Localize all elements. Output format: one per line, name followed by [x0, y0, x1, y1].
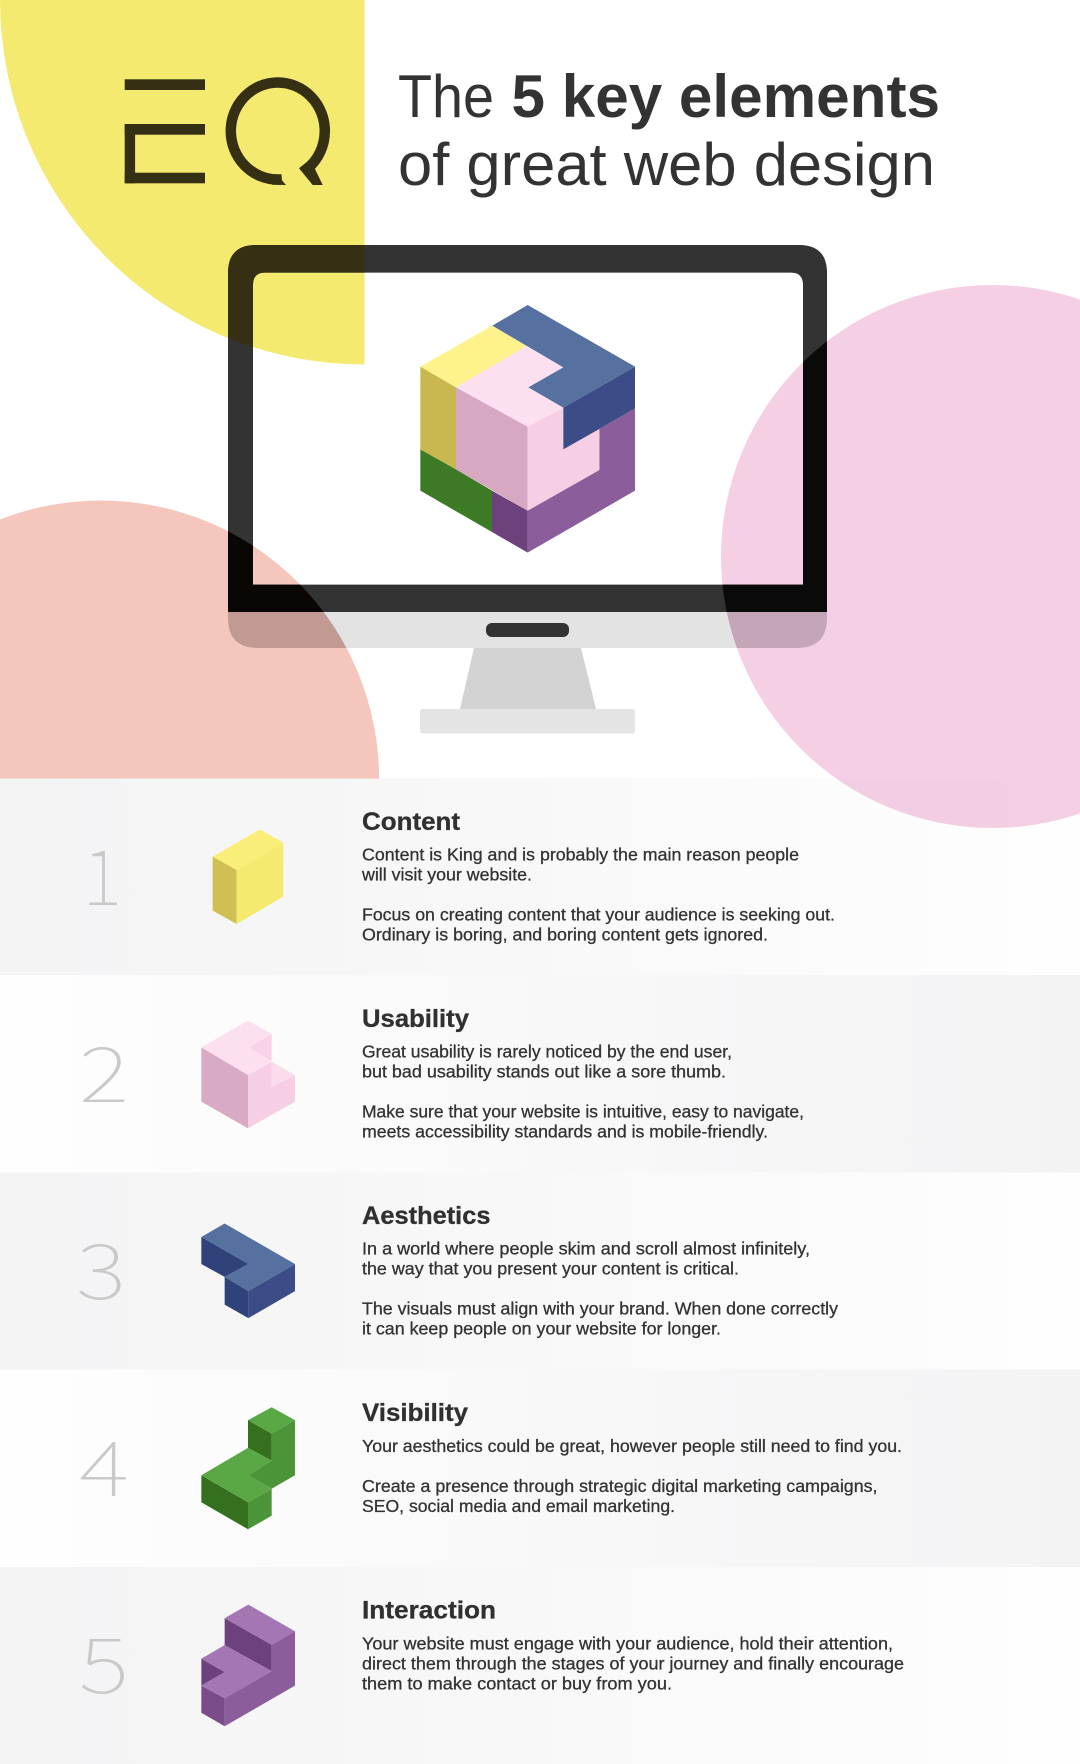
text: usability description: meets accessibility standards and is mobile-friendly. [362, 1121, 768, 1141]
icon: assembled cube [420, 305, 635, 553]
text: interaction description: Your website must engage with your audience, hold their attention, [362, 1634, 893, 1654]
text: content description: Focus on creating content that your audience is seeking out. [362, 904, 835, 924]
text: interaction description: direct them through the stages of your journey and finally encourage [362, 1654, 904, 1674]
monitor bezel [228, 245, 827, 612]
text: usability description [362, 1042, 804, 1141]
text: content description: Ordinary is boring, and boring content gets ignored. [362, 924, 768, 944]
title: of great web design [398, 131, 935, 198]
icon: blue block [201, 1224, 295, 1318]
text: aesthetics description: The visuals must align with your brand. When done correctly [362, 1298, 838, 1318]
panel: row 5 interaction [0, 1567, 1080, 1764]
panel: row 3 aesthetics [0, 1172, 1080, 1370]
text: aesthetics description: In a world where people skim and scroll almost infinitely, [362, 1239, 810, 1259]
panel: row 2 usability [0, 975, 1080, 1172]
icon: pink block [201, 1021, 295, 1128]
text: interaction description: them to make contact or buy from you. [362, 1674, 672, 1694]
logo: EQ [125, 79, 325, 185]
text: visibility description: Create a presence through strategic digital marketing campaigns, [362, 1476, 878, 1496]
monitor base [420, 709, 635, 734]
text: aesthetics description [362, 1239, 838, 1338]
number 3: 3 [76, 1211, 126, 1322]
icon: purple block [201, 1605, 295, 1726]
heading: Visibility: Visibility [362, 1399, 468, 1427]
number 4: 4 [79, 1408, 129, 1519]
text: usability description: but bad usability stands out like a sore thumb. [362, 1062, 726, 1082]
title: 5 key elements [512, 63, 940, 130]
monitor stand [460, 648, 596, 709]
title [398, 63, 940, 198]
heading: Interaction: Interaction [362, 1596, 496, 1624]
text: interaction description [362, 1634, 904, 1694]
background circle: coral [0, 500, 379, 778]
heading: Usability: Usability [362, 1005, 469, 1033]
panel: row 4 visibility [0, 1370, 1080, 1567]
text: aesthetics description: the way that you present your content is critical. [362, 1259, 739, 1279]
monitor button [486, 623, 569, 637]
number 5: 5 [79, 1605, 129, 1716]
title: The [398, 63, 494, 130]
text: visibility description: Your aesthetics could be great, however people still need to find you. [362, 1436, 902, 1456]
background circle: yellow [0, 0, 364, 364]
number 2: 2 [79, 1014, 129, 1125]
text: content description: Content is King and is probably the main reason people [362, 845, 799, 865]
text: content description: will visit your website. [361, 865, 532, 885]
text: content description [361, 845, 835, 944]
text: usability description: Great usability is rarely noticed by the end user, [362, 1042, 732, 1062]
background circle: pink [721, 285, 1080, 828]
monitor [228, 245, 827, 734]
icon: yellow block [213, 829, 283, 924]
monitor chin [228, 612, 827, 648]
heading: Aesthetics: Aesthetics [362, 1202, 490, 1230]
text: visibility description [362, 1436, 902, 1516]
heading: Content: Content [362, 808, 461, 836]
icon: green block [201, 1407, 295, 1529]
text: usability description: Make sure that your website is intuitive, easy to navigate, [362, 1101, 804, 1121]
text: aesthetics description: it can keep people on your website for longer. [362, 1318, 721, 1338]
panel: row 1 content [0, 778, 1080, 975]
number 1: 1 [82, 817, 122, 928]
text: visibility description: SEO, social media and email marketing. [362, 1496, 675, 1516]
